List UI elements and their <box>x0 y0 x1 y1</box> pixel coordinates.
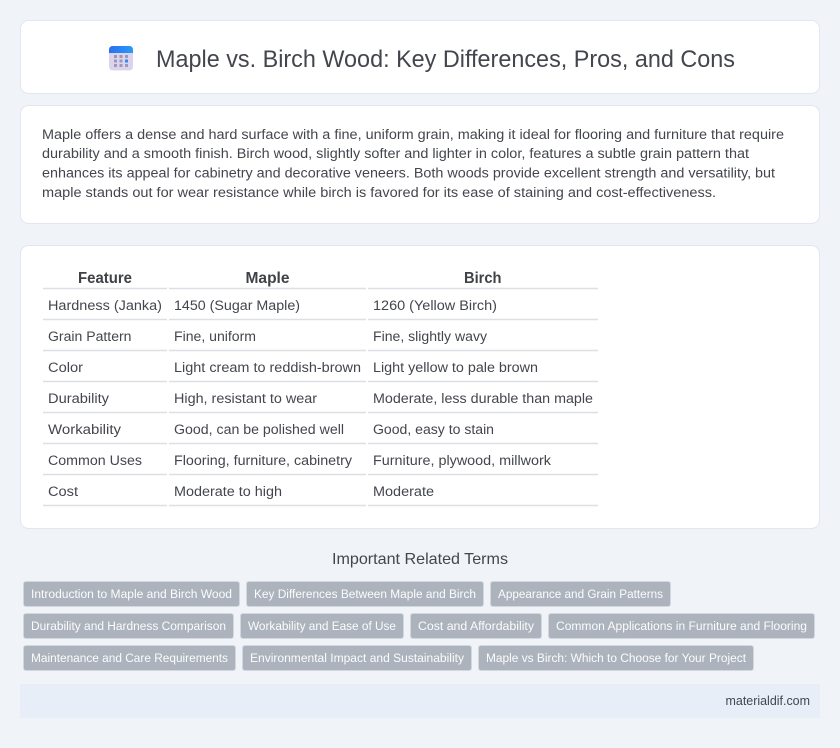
row: cost: Moderate to high <box>174 484 282 500</box>
tag <box>24 614 234 638</box>
heading: related terms: Important Related Terms <box>332 551 508 568</box>
panel: comparison table <box>20 246 820 528</box>
row: cost: Cost <box>48 484 78 500</box>
row: hardness <box>43 298 598 320</box>
row: common uses <box>43 453 598 474</box>
table header row: Feature <box>78 270 132 287</box>
tag <box>478 646 754 670</box>
row: common uses: Flooring, furniture, cabinetry <box>174 453 353 469</box>
row: common uses: Furniture, plywood, millwork <box>373 453 552 469</box>
row: common uses: Common Uses <box>48 453 142 469</box>
tag: Environmental Impact and Sustainability <box>250 651 465 665</box>
row: hardness: Hardness (Janka) <box>48 298 162 314</box>
row: durability <box>43 391 598 412</box>
tag: Key Differences Between Maple and Birch <box>254 587 476 601</box>
tag <box>242 646 472 670</box>
tag: Durability and Hardness Comparison <box>31 619 226 633</box>
tag: Maintenance and Care Requirements <box>31 651 228 665</box>
tag: Introduction to Maple and Birch Wood <box>31 587 232 601</box>
text block: summary: enhances its appeal for cabinetry and decorative veneers. Both woods provide excellent strength and versatility, but <box>42 166 775 182</box>
row: durability: Durability <box>48 391 110 407</box>
text block: summary: maple stands out for wear resistance while birch is favored for its ease of staining and cost-effectiveness. <box>42 185 716 201</box>
row: grain pattern: Fine, slightly wavy <box>373 329 488 345</box>
row: cost: Moderate <box>373 484 434 500</box>
tag <box>410 614 542 638</box>
tag <box>24 646 236 670</box>
tag <box>240 614 404 638</box>
tag: Common Applications in Furniture and Flooring <box>556 619 807 633</box>
text block: summary: Maple offers a dense and hard surface with a fine, uniform grain, making it ideal for flooring and furniture that require <box>42 127 784 143</box>
row: hardness: 1450 (Sugar Maple) <box>174 298 300 314</box>
tag: Workability and Ease of Use <box>248 619 396 633</box>
row: workability <box>43 422 598 444</box>
row: workability: Good, can be polished well <box>174 422 344 438</box>
table header row: Maple <box>246 270 290 287</box>
row: grain pattern: Grain Pattern <box>48 329 132 345</box>
tag: Cost and Affordability <box>418 619 535 633</box>
row: color: Light cream to reddish-brown <box>174 360 361 376</box>
row: workability: Workability <box>48 422 122 438</box>
panel: header <box>20 20 820 94</box>
text block: summary: durability and a smooth finish. Birch wood, slightly softer and lighter in color, features a subtle grain pattern that <box>42 146 749 162</box>
footer <box>20 684 820 718</box>
tag group: related terms <box>24 582 814 670</box>
text block: summary <box>42 127 784 201</box>
tag <box>246 582 484 606</box>
row: hardness: 1260 (Yellow Birch) <box>373 298 497 314</box>
title: Maple vs. Birch Wood: Key Differences, Pros, and Cons <box>156 46 735 73</box>
table header row <box>43 270 598 288</box>
row: durability: Moderate, less durable than maple <box>373 391 593 407</box>
tag: Maple vs Birch: Which to Choose for Your Project <box>486 651 747 665</box>
row: color: Light yellow to pale brown <box>373 360 538 376</box>
tag: Appearance and Grain Patterns <box>498 587 663 601</box>
row: cost <box>43 484 598 506</box>
table header row: Birch <box>464 270 502 287</box>
row: durability: High, resistant to wear <box>174 391 317 407</box>
footer: materialdif.com <box>726 694 810 708</box>
panel: summary paragraph <box>20 106 820 224</box>
row: color <box>43 360 598 382</box>
row: grain pattern: Fine, uniform <box>174 329 256 345</box>
icon: calendar <box>109 46 133 70</box>
row: grain pattern <box>43 329 598 350</box>
row: color: Color <box>48 360 83 376</box>
row: workability: Good, easy to stain <box>373 422 494 438</box>
tag <box>490 582 670 606</box>
tag <box>24 582 240 606</box>
tag <box>548 614 814 638</box>
